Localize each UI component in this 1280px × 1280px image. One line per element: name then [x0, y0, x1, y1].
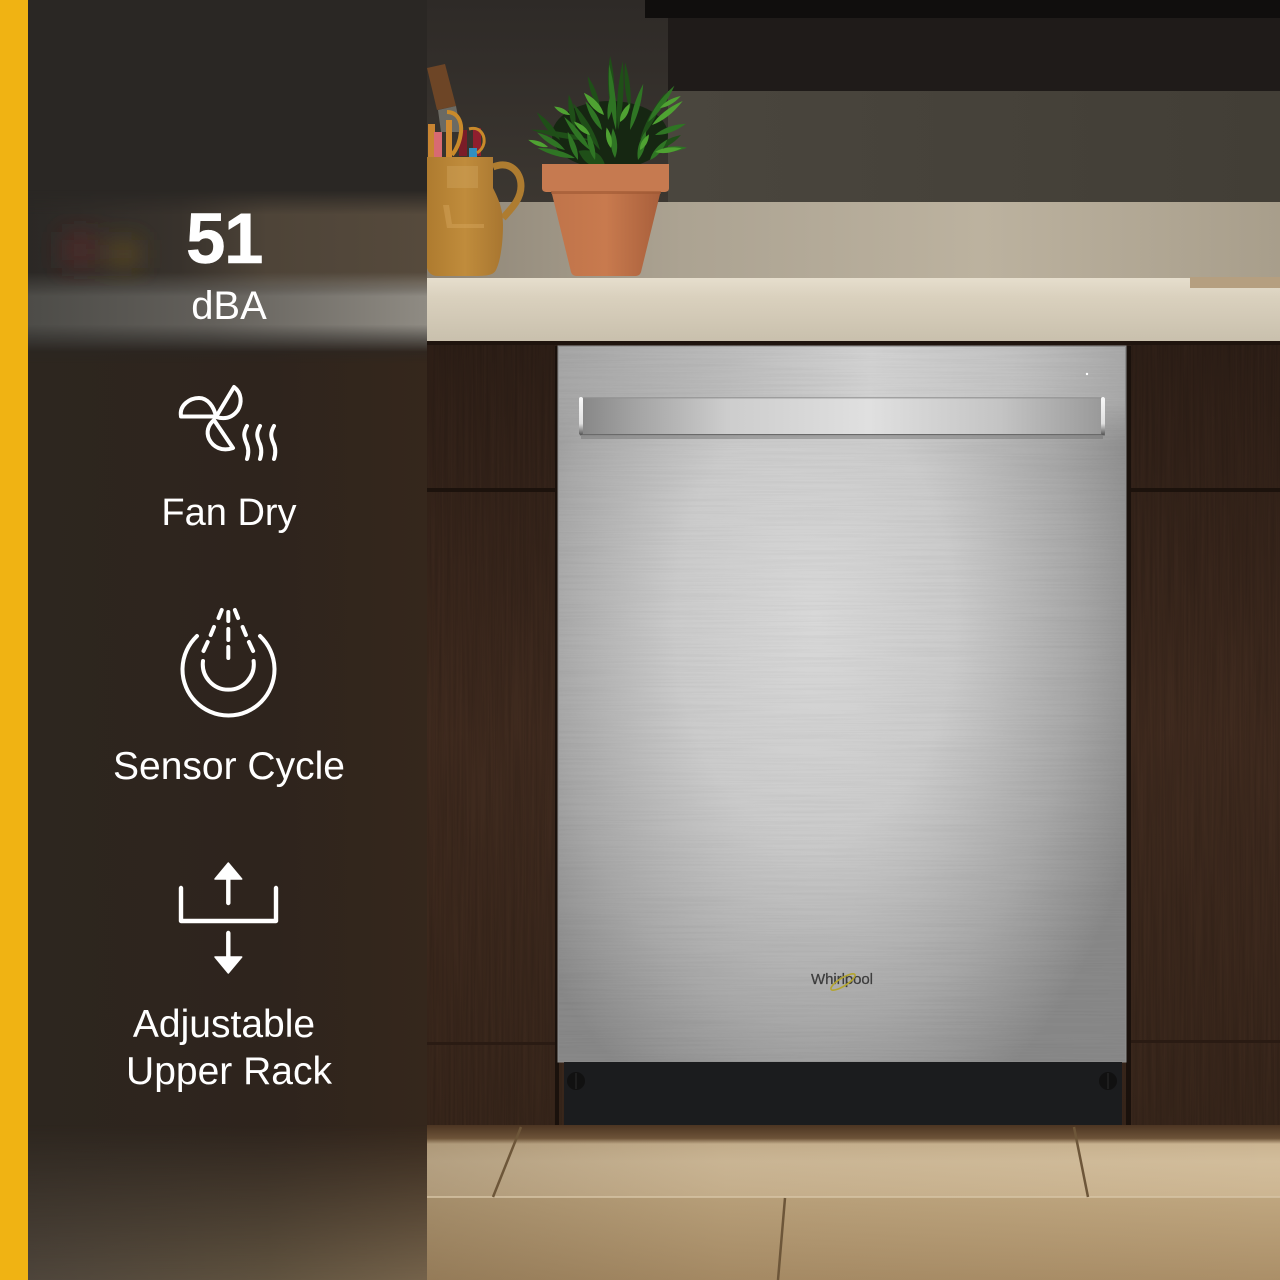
label: Adjustable: [133, 1003, 315, 1046]
floor tiles: [427, 1125, 1280, 1280]
countertop: [427, 277, 1280, 341]
feature: Adjustable Upper Rack: [126, 863, 332, 1093]
wall below shelf: [668, 90, 1280, 203]
blurred colour smudge: [62, 232, 140, 268]
jug handle: [493, 165, 521, 218]
logo: Whirlpool: [811, 971, 873, 988]
unit dBA: dBA: [191, 284, 267, 328]
indicator light: [1086, 373, 1088, 375]
label: Fan Dry: [161, 492, 297, 534]
icon: spray in ring: [183, 610, 275, 716]
dark shelf: [645, 0, 1280, 91]
feature: Adjustable Upper Rack: Upper Rack: [126, 1050, 332, 1093]
jug body: [427, 157, 503, 276]
kitchen wall: [427, 0, 1280, 205]
brushed texture: [559, 347, 1125, 1061]
stainless door: [558, 346, 1126, 1062]
handle: [579, 397, 1105, 439]
backsplash: [427, 202, 1280, 280]
blurred scene bands: [28, 190, 427, 1280]
pencils: [428, 112, 484, 158]
cabinets: [427, 341, 1280, 1127]
brush handle: [427, 64, 456, 110]
feature: Sensor Cycle: [113, 610, 345, 788]
feature: Fan Dry: [161, 387, 297, 534]
dishwasher: [558, 346, 1126, 1125]
plant: [527, 56, 687, 190]
top control strip: [559, 347, 1125, 432]
icon: fan with heat waves: [181, 387, 275, 459]
stat: 51 dBA: [186, 200, 267, 328]
jug highlight: [447, 166, 478, 188]
number 51: 51: [186, 200, 262, 279]
toe kick: [564, 1062, 1122, 1125]
label: Sensor Cycle: [113, 745, 345, 788]
yellow stripe: [0, 0, 28, 1280]
pencil jug: [427, 64, 521, 276]
icon: rack with up and down arrows: [181, 863, 276, 973]
blurred feature panel: [28, 0, 427, 1280]
terracotta pot: [542, 164, 669, 276]
